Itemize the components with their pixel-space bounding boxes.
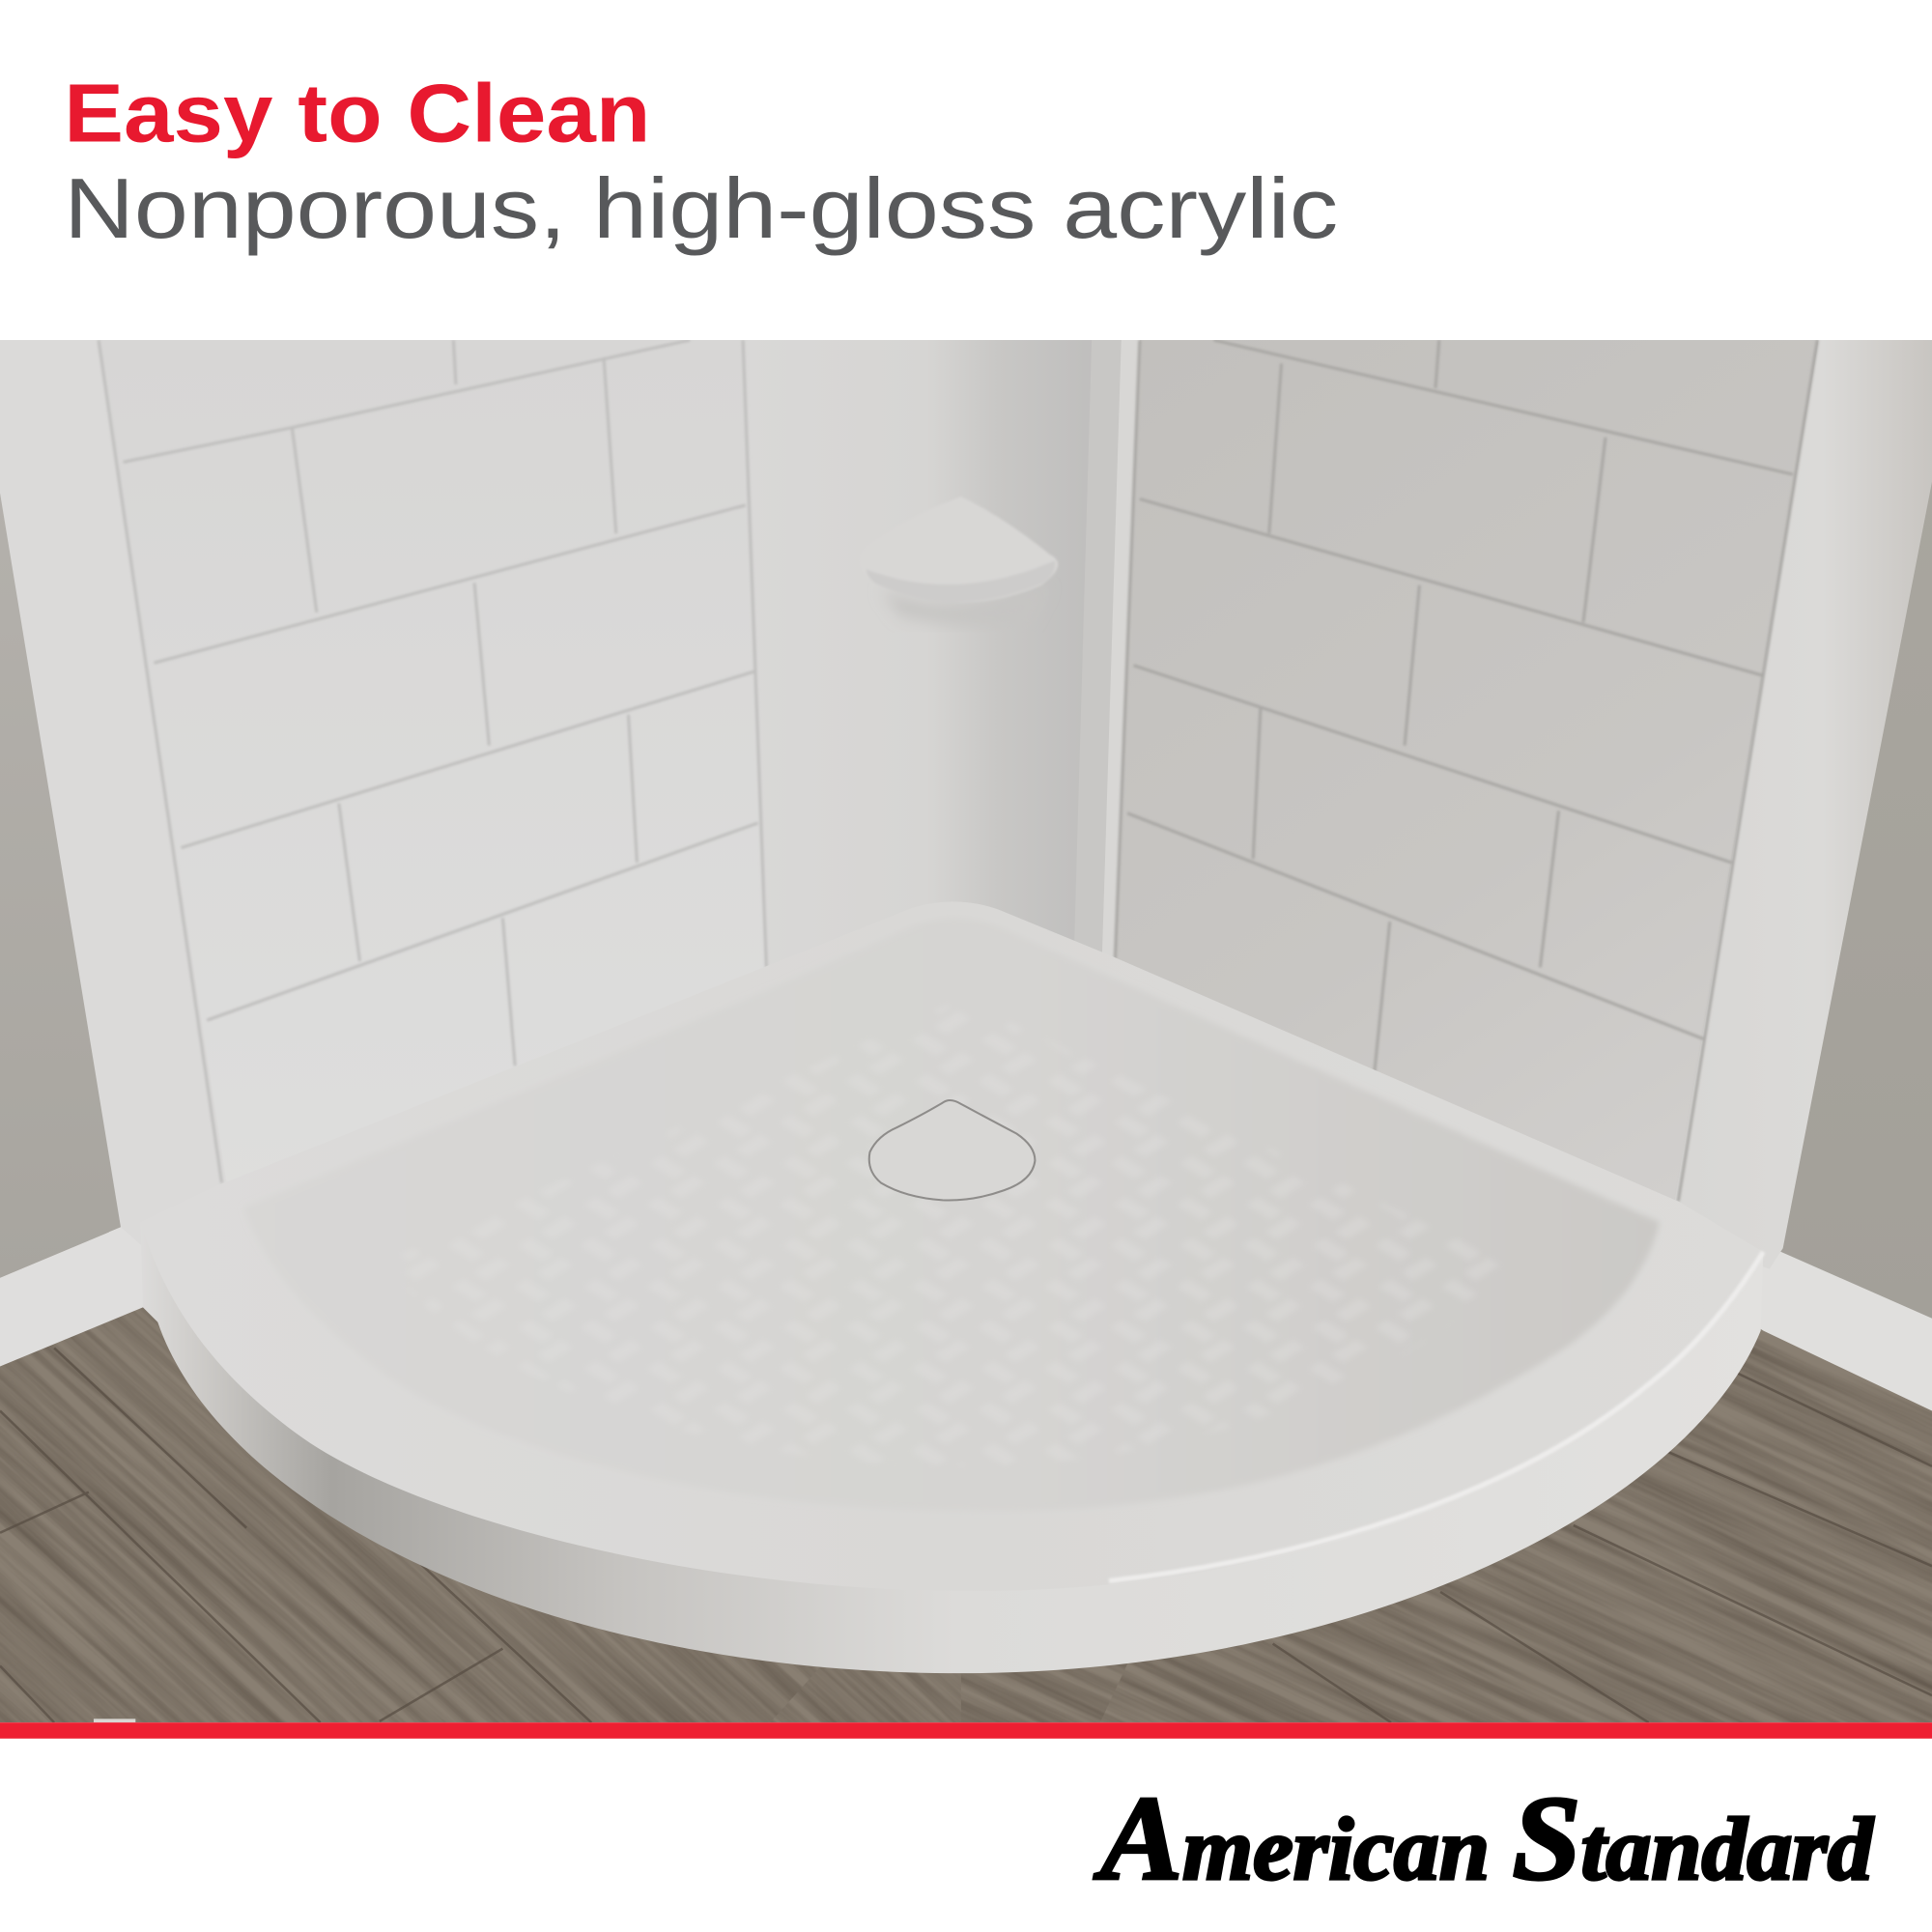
logo: American Standard: American Standard <box>1094 1773 1875 1906</box>
left tile wall <box>99 340 788 1233</box>
left wall trim <box>0 340 246 1244</box>
right wall grout lines <box>1115 340 1817 1202</box>
left baseboard <box>0 1227 143 1366</box>
tiny base label <box>94 1719 135 1722</box>
shower pan rim <box>140 901 1763 1591</box>
right wall trim <box>1669 340 1932 1269</box>
corner column <box>746 340 1092 960</box>
left wall grout lines <box>99 340 766 1182</box>
right baseboard <box>1756 1249 1932 1410</box>
right grey wall <box>1781 482 1932 1319</box>
title: Easy to Clean: Easy to Clean <box>64 69 650 160</box>
corner seam strip <box>1086 340 1122 952</box>
corner soap shelf <box>860 497 1058 625</box>
subtitle: Nonporous, high-gloss acrylic: Nonporous, high-gloss acrylic <box>64 160 1338 256</box>
rim highlight <box>1109 1252 1763 1580</box>
photo panel: corner shower base <box>0 340 1932 1722</box>
slip-resistant texture <box>382 998 1518 1466</box>
right tile wall <box>1109 340 1819 1244</box>
red divider bar <box>0 1722 1932 1739</box>
shower pan basin <box>1186 1019 1659 1490</box>
shower pan front face <box>140 1222 1763 1673</box>
drain cover <box>869 1100 1035 1200</box>
left grey wall <box>0 493 121 1277</box>
wood floor <box>0 1233 1932 1722</box>
